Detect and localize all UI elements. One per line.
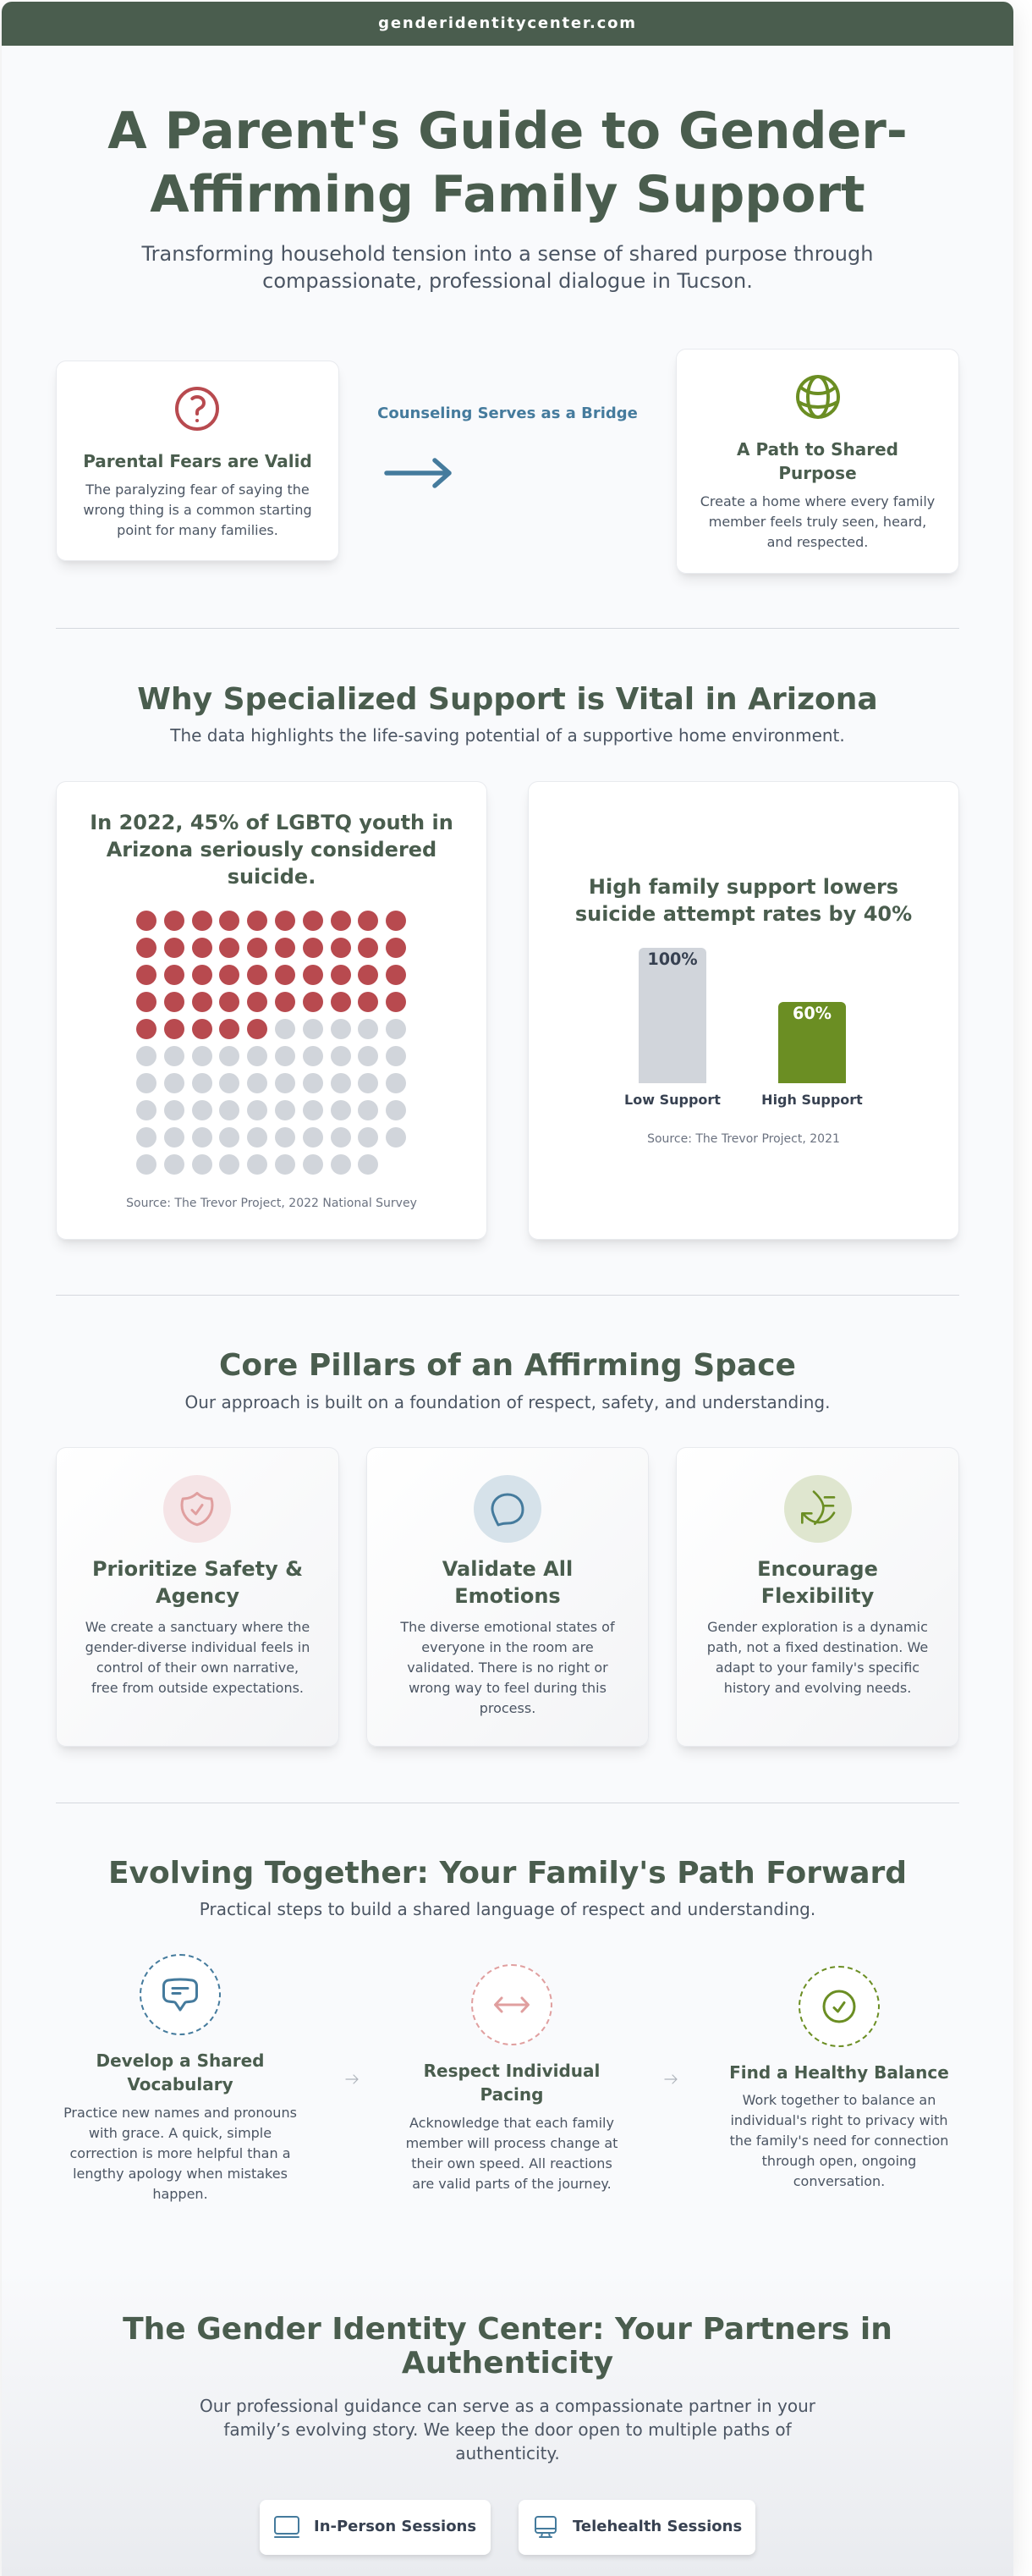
icon: desktop: [535, 2516, 557, 2538]
icon: globe: [796, 375, 840, 419]
text: flexibility: adapt to your family's specific: [716, 1660, 919, 1676]
text: parental fears: point for many families.: [117, 522, 278, 538]
source: waffle chart: Source: The Trevor Project, 2022 National Survey: [126, 1197, 417, 1210]
footer text: Our professional guidance can serve as a compassionate partner in your: [200, 2396, 815, 2416]
heading: emotions: [442, 1557, 573, 1608]
heading: emotions: Validate All: [442, 1557, 573, 1581]
text: emotions: validated. There is no right or: [407, 1660, 608, 1676]
text: flexibility: Gender exploration is a dynamic: [707, 1619, 928, 1635]
step: individual pacing: [406, 1964, 618, 2192]
text: emotions: The diverse emotional states of: [400, 1619, 615, 1635]
heading: individual pacing: Pacing: [480, 2084, 543, 2105]
header bar: genderidentitycenter.com: [378, 14, 637, 32]
heading: 45 percent: suicide.: [228, 865, 316, 889]
heading: individual pacing: [424, 2061, 600, 2105]
text: healthy balance: conversation.: [793, 2173, 885, 2189]
text: flexibility: path, not a fixed destination. We: [707, 1639, 928, 1655]
label: in-person sessions: In-Person Sessions: [314, 2518, 476, 2535]
text: safety: [85, 1619, 310, 1696]
source: bar chart: Source: The Trevor Project, 2021: [647, 1132, 840, 1146]
text: safety: free from outside expectations.: [91, 1680, 304, 1696]
icon: laptop: [274, 2516, 299, 2538]
panel: bar chart card: [528, 781, 959, 1240]
arrow: step two to three: [665, 2075, 677, 2083]
text: emotions: [400, 1619, 615, 1716]
text: emotions: everyone in the room are: [421, 1639, 594, 1655]
label: high support: High Support: [761, 1092, 863, 1108]
panel: flexibility pillar: [676, 1447, 959, 1747]
title: Affirming Family Support: [150, 165, 865, 224]
bar: high support: 60%: [793, 1004, 832, 1023]
title: [107, 102, 908, 224]
text: shared vocabulary: [63, 2105, 297, 2202]
text: individual pacing: member will process change at: [406, 2135, 618, 2151]
heading: specialized support: Why Specialized Support is Vital in Arizona: [137, 682, 878, 717]
heading: evolving together: Evolving Together: Your Family's Path Forward: [108, 1856, 907, 1891]
text: emotions: process.: [480, 1700, 535, 1716]
text: parental fears: wrong thing is a common starting: [83, 502, 312, 518]
label: telehealth sessions: Telehealth Sessions: [573, 2518, 742, 2535]
step: healthy balance: [729, 1966, 949, 2189]
text: emotions: wrong way to feel during this: [409, 1680, 607, 1696]
text: individual pacing: [406, 2115, 618, 2192]
heading: flexibility: Encourage: [757, 1557, 878, 1581]
heading: shared vocabulary: Vocabulary: [127, 2074, 233, 2094]
text: individual pacing: their own speed. All reactions: [411, 2155, 612, 2171]
icon: speech bubble: [474, 1475, 541, 1543]
arrow: step one to two: [345, 2075, 359, 2083]
bridge label: Counseling Serves as a Bridge: [377, 405, 638, 422]
text: individual pacing: are valid parts of the journey.: [412, 2176, 612, 2192]
bar chart: [624, 948, 863, 1108]
text: healthy balance: individual's right to privacy with: [730, 2112, 948, 2128]
icon: flexible arrows: [784, 1475, 852, 1543]
heading: safety: [92, 1557, 303, 1608]
text: shared vocabulary: happen.: [152, 2186, 208, 2202]
waffle chart: 45 of 100: [136, 911, 406, 1175]
text: safety: gender-diverse individual feels in: [85, 1639, 310, 1655]
heading: family support: [575, 875, 912, 926]
heading: core pillars: Core Pillars of an Affirming Space: [219, 1348, 796, 1383]
footer text: [200, 2396, 815, 2463]
text: shared purpose: member feels truly seen, heard,: [709, 514, 926, 530]
heading: family support: suicide attempt rates by 40%: [575, 902, 912, 926]
arrow: bridge: [384, 458, 452, 488]
icon: question circle: [175, 387, 219, 431]
heading: shared vocabulary: [96, 2050, 264, 2094]
heading: parental fears: Parental Fears are Valid: [83, 451, 312, 471]
footer text: family’s evolving story. We keep the door open to multiple paths of: [223, 2419, 792, 2440]
text: healthy balance: Work together to balance an: [743, 2092, 936, 2108]
icon: chat bubble: [140, 1954, 221, 2035]
panel: parental fears: [56, 361, 339, 561]
heading: 45 percent: Arizona seriously considered: [107, 838, 436, 861]
button: telehealth sessions: [519, 2500, 755, 2555]
text: healthy balance: [730, 2092, 948, 2189]
heading: 45 percent: In 2022, 45% of LGBTQ youth in: [90, 811, 453, 834]
text: individual pacing: Acknowledge that each family: [409, 2115, 614, 2131]
bar: high support: [778, 1002, 846, 1083]
step: shared vocabulary: [63, 1954, 297, 2202]
icon: double arrow: [471, 1964, 552, 2045]
heading: individual pacing: Respect Individual: [424, 2061, 600, 2081]
text: flexibility: history and evolving needs.: [724, 1680, 911, 1696]
panel: waffle chart card: [56, 781, 487, 1240]
text: shared vocabulary: correction is more helpful than a: [69, 2145, 291, 2161]
subheading: core pillars: Our approach is built on a foundation of respect, safety, and understanding.: [185, 1392, 830, 1412]
footer text: authenticity.: [455, 2443, 560, 2463]
panel: emotions pillar: [366, 1447, 649, 1747]
panel: shared purpose: [676, 349, 959, 574]
text: safety: We create a sanctuary where the: [85, 1619, 310, 1635]
subtitle: compassionate, professional dialogue in Tucson.: [262, 269, 753, 293]
text: flexibility: [707, 1619, 928, 1696]
text: shared purpose: [700, 493, 935, 550]
footer heading: [123, 2312, 892, 2381]
text: shared purpose: and respected.: [767, 534, 868, 550]
text: shared vocabulary: with grace. A quick, simple: [89, 2125, 272, 2141]
text: shared vocabulary: lengthy apology when mistakes: [73, 2166, 288, 2182]
heading: flexibility: Flexibility: [761, 1584, 874, 1608]
header bar: [2, 2, 1013, 46]
heading: emotions: Emotions: [454, 1584, 561, 1608]
subheading: evolving together: Practical steps to build a shared language of respect and understanding.: [200, 1899, 815, 1919]
text: shared purpose: Create a home where every family: [700, 493, 935, 509]
footer heading: The Gender Identity Center: Your Partners in: [123, 2312, 892, 2347]
bar: low support: 100%: [647, 949, 698, 969]
text: healthy balance: the family's need for connection: [730, 2133, 948, 2149]
label: low support: Low Support: [624, 1092, 721, 1108]
icon: check circle: [799, 1966, 880, 2047]
heading: healthy balance: Find a Healthy Balance: [729, 2062, 949, 2083]
text: healthy balance: through open, ongoing: [762, 2153, 916, 2169]
text: shared vocabulary: Practice new names and pronouns: [63, 2105, 297, 2121]
icon: shield: [163, 1475, 231, 1543]
subheading: specialized support: The data highlights the life-saving potential of a supportive home environment.: [170, 725, 845, 746]
subtitle: [141, 242, 873, 293]
text: safety: control of their own narrative,: [96, 1660, 299, 1676]
heading: shared purpose: Purpose: [778, 463, 857, 483]
text: parental fears: [83, 482, 312, 538]
footer heading: Authenticity: [402, 2346, 613, 2381]
panel: safety pillar: [56, 1447, 339, 1747]
heading: shared vocabulary: Develop a Shared: [96, 2050, 264, 2071]
heading: 45 percent: [90, 811, 453, 889]
heading: shared purpose: A Path to Shared: [737, 439, 898, 460]
subtitle: Transforming household tension into a sense of shared purpose through: [142, 242, 873, 266]
heading: flexibility: [757, 1557, 878, 1608]
heading: shared purpose: [737, 439, 898, 483]
footer panel: [2, 2268, 1013, 2576]
heading: safety: Prioritize Safety &: [92, 1557, 303, 1581]
heading: family support: High family support lowers: [589, 875, 898, 899]
text: parental fears: The paralyzing fear of saying the: [85, 482, 310, 498]
title: A Parent's Guide to Gender-: [107, 102, 908, 161]
button: in-person sessions: [260, 2500, 491, 2555]
heading: safety: Agency: [156, 1584, 239, 1608]
bar: low support: [639, 948, 706, 1083]
